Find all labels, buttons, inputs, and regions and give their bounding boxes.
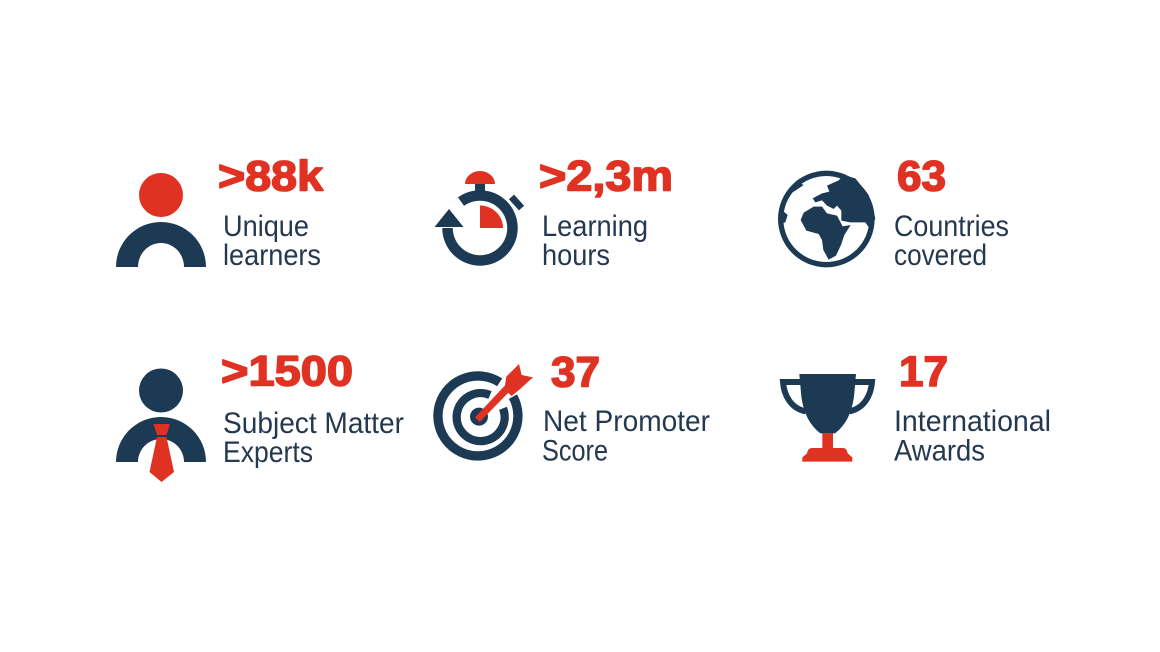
icon: target with arrow [438, 364, 533, 456]
stat: 17: 17 [899, 348, 948, 396]
label: Unique learners [223, 210, 321, 272]
stat: >2,3m: >2,3m [539, 152, 673, 200]
label: Net Promoter Score: Score [542, 434, 608, 468]
label: Net Promoter Score [542, 405, 710, 468]
label: Learning hours: Learning [542, 210, 648, 243]
stat: >1500: >1500 [221, 348, 353, 396]
panel: net promoter score [438, 348, 710, 468]
icon: expert with tie [116, 368, 206, 482]
label: Subject Matter Experts [223, 407, 404, 469]
label: International Awards: Awards [894, 434, 985, 468]
label: Countries covered: covered [894, 239, 987, 272]
label: Countries covered: Countries [894, 210, 1009, 243]
stat: >88k: >88k [218, 152, 323, 200]
stat: 37: 37 [551, 348, 600, 396]
label: Learning hours [542, 210, 648, 272]
label: Unique learners: learners [223, 239, 321, 272]
panel: unique learners [116, 152, 323, 272]
label: Unique learners: Unique [223, 210, 309, 243]
icon: trophy [783, 374, 872, 462]
label: Learning hours: hours [542, 239, 610, 272]
label: Subject Matter Experts: Subject Matter [223, 407, 404, 440]
icon: globe [778, 171, 875, 267]
label: International Awards: International [894, 405, 1051, 438]
icon: learner [116, 173, 206, 267]
panel: learning hours [434, 152, 673, 272]
panel: international awards [783, 348, 1051, 468]
panel: countries covered [778, 152, 1009, 272]
panel: subject matter experts [116, 348, 404, 482]
label: Countries covered [894, 210, 1009, 272]
label: Subject Matter Experts: Experts [223, 436, 313, 469]
label: Net Promoter Score: Net Promoter [543, 405, 710, 438]
icon: stopwatch [434, 171, 524, 260]
label: International Awards [894, 405, 1051, 468]
stat: 63: 63 [897, 152, 946, 200]
